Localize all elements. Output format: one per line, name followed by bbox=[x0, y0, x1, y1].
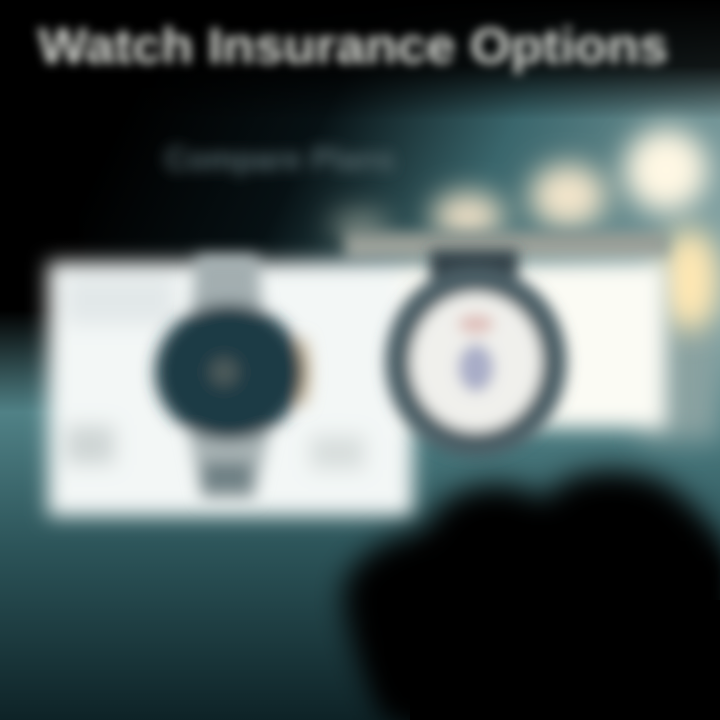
bokeh lights bbox=[330, 128, 720, 332]
header strip bbox=[345, 232, 667, 258]
watch left bbox=[155, 255, 307, 500]
watch right bbox=[398, 250, 554, 444]
title: Watch Insurance Options bbox=[38, 18, 668, 74]
subtitle: Compare Plans bbox=[165, 141, 395, 177]
hand silhouette bbox=[343, 471, 720, 720]
panel: comparison card bbox=[48, 262, 666, 516]
